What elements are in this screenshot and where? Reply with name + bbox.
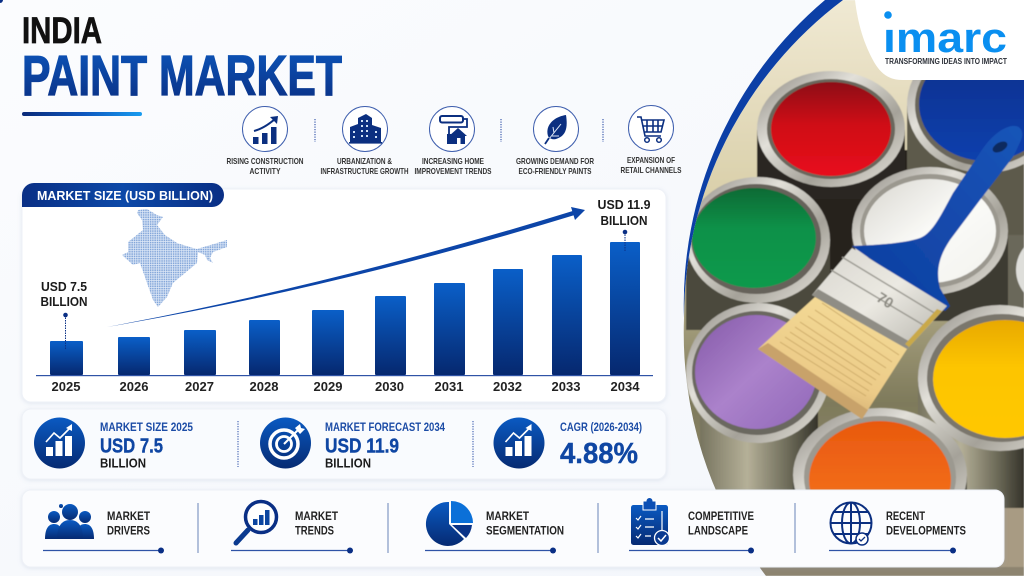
section: market segmentation: SEGMENTATION <box>486 526 564 538</box>
driver: rising construction: ACTIVITY <box>250 167 281 176</box>
section: market segmentation: MARKET <box>486 511 529 523</box>
callout: 2025 value: BILLION <box>40 295 88 309</box>
stat: market size 2025 <box>34 418 194 470</box>
section: market trends: TRENDS <box>295 526 334 538</box>
section: market drivers: DRIVERS <box>107 526 150 538</box>
driver: eco-friendly paints: GROWING DEMAND FOR <box>516 157 594 166</box>
title: INDIA <box>22 9 102 51</box>
driver: rising construction <box>226 106 304 176</box>
brush size number: 70 <box>873 289 896 312</box>
section: market trends <box>231 502 353 554</box>
section: market drivers <box>43 504 164 554</box>
bottom strip <box>760 567 1024 576</box>
panel: key statistics <box>22 409 666 479</box>
driver: rising construction: RISING CONSTRUCTION <box>226 157 304 166</box>
stat: CAGR <box>494 418 642 470</box>
driver: retail channels <box>620 106 682 175</box>
stat: market size 2025: MARKET SIZE 2025 <box>100 422 194 434</box>
growth drivers row <box>226 106 682 176</box>
callout: 2034 value: BILLION <box>600 214 648 228</box>
bars <box>50 242 640 375</box>
stat: market forecast 2034: USD 11.9 <box>325 436 399 458</box>
section: market trends: MARKET <box>295 511 338 523</box>
panel: market size chart <box>22 183 666 402</box>
callout: 2034 value <box>598 198 651 251</box>
year labels: 2026 <box>120 379 148 394</box>
can: yellow <box>918 305 1024 508</box>
stat: CAGR: CAGR (2026-2034) <box>560 422 642 434</box>
driver: home improvement: IMPROVEMENT TRENDS <box>414 167 492 176</box>
stat: market forecast 2034: MARKET FORECAST 2034 <box>325 422 445 434</box>
year labels: 2028 <box>250 379 278 394</box>
can: green <box>686 177 830 330</box>
driver: home improvement <box>414 106 492 176</box>
can: orange <box>792 407 968 490</box>
callout: 2025 value: USD 7.5 <box>41 280 87 294</box>
stat: market forecast 2034 <box>260 418 445 470</box>
panel: report sections <box>22 490 1004 567</box>
title <box>22 9 342 108</box>
chart heading pill: MARKET SIZE (USD BILLION) <box>37 188 213 203</box>
driver: eco-friendly paints: ECO-FRIENDLY PAINTS <box>518 167 592 176</box>
India dotted map <box>122 209 227 307</box>
year labels: 2034 <box>611 379 640 394</box>
can: white partial <box>1015 247 1024 294</box>
driver: urbanization: INFRASTRUCTURE GROWTH <box>320 167 409 176</box>
can: red <box>757 71 905 199</box>
year labels: 2027 <box>185 379 214 394</box>
can: purple <box>686 303 830 503</box>
paint cans photo <box>680 0 1024 576</box>
year labels: 2032 <box>493 379 522 394</box>
stat: market forecast 2034: BILLION <box>325 456 371 470</box>
callout: 2034 value: USD 11.9 <box>598 198 651 212</box>
section: competitive landscape: COMPETITIVE <box>688 511 754 523</box>
driver: home improvement: INCREASING HOME <box>422 157 484 166</box>
year labels: 2033 <box>552 379 580 394</box>
driver: retail channels: EXPANSION OF <box>627 156 675 165</box>
logo wordmark: imarc <box>883 14 1007 61</box>
paintbrush <box>758 126 1022 419</box>
section: competitive landscape <box>629 498 754 554</box>
stat: CAGR: 4.88% <box>560 438 638 470</box>
section: recent developments: RECENT <box>886 511 925 523</box>
year labels: 2025 <box>52 379 80 394</box>
section: competitive landscape: LANDSCAPE <box>688 526 748 538</box>
section: recent developments: DEVELOPMENTS <box>886 526 966 538</box>
title underline <box>22 112 142 116</box>
logo panel <box>855 0 1024 80</box>
stat: market size 2025: USD 7.5 <box>100 436 163 458</box>
driver: urbanization <box>320 106 409 176</box>
section: market segmentation <box>425 501 564 554</box>
year labels <box>52 379 640 394</box>
year labels: 2029 <box>314 379 342 394</box>
title: PAINT MARKET <box>22 44 342 108</box>
can: blue <box>906 80 1024 235</box>
can: white <box>852 167 1008 321</box>
stat: market size 2025: BILLION <box>100 456 146 470</box>
chart heading pill <box>22 183 224 207</box>
year labels: 2031 <box>435 379 463 394</box>
callout: 2025 value <box>40 280 88 350</box>
section: recent developments <box>829 502 966 554</box>
year labels: 2030 <box>375 379 404 394</box>
driver: retail channels: RETAIL CHANNELS <box>620 166 682 175</box>
driver: eco-friendly paints <box>516 106 594 176</box>
driver: urbanization: URBANIZATION & <box>337 157 392 166</box>
growth arrow <box>107 207 585 327</box>
section: market drivers: MARKET <box>107 511 150 523</box>
blue arc accent <box>684 0 843 318</box>
